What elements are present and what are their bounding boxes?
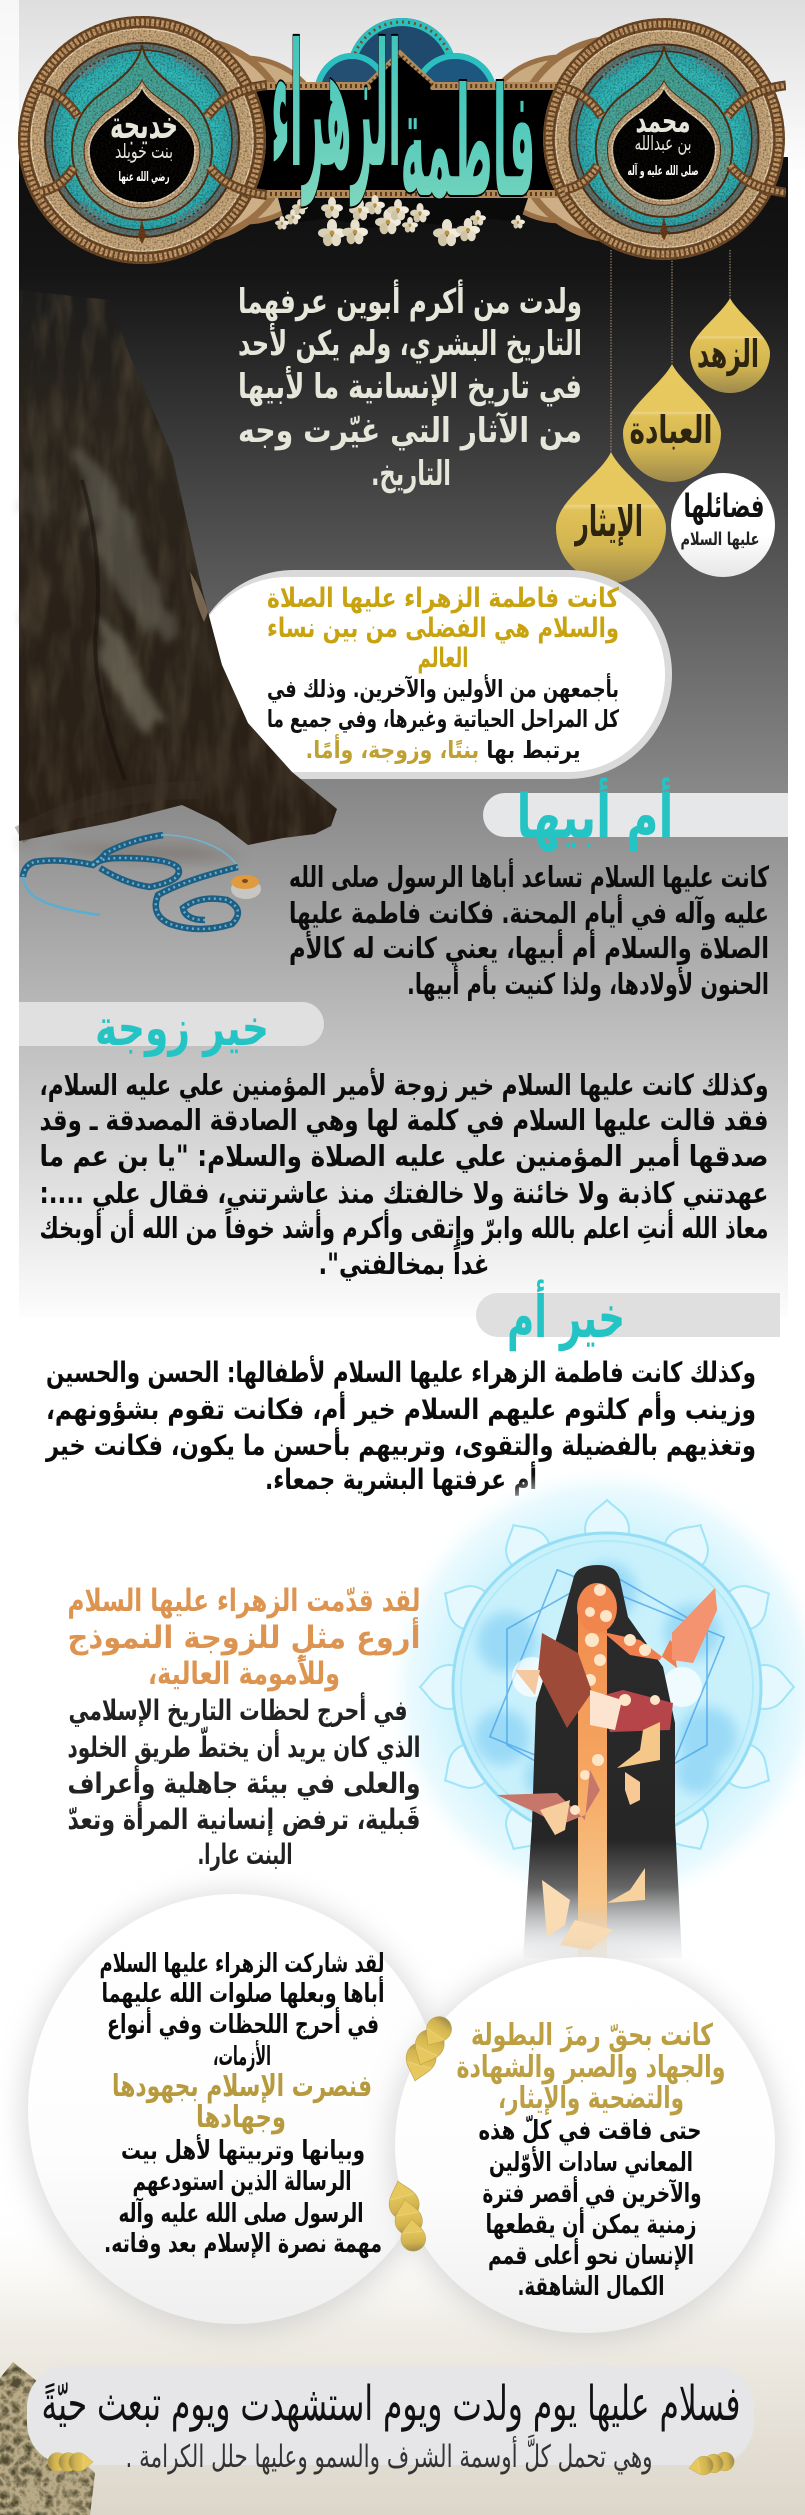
text block: model wife: الذي كان يريد أن يختطّ طريق الخلود: [68, 1726, 420, 1764]
medallion: Muhammad: محمد: [636, 102, 690, 140]
icon: gold petals, upper: [400, 2012, 456, 2085]
banner: closing salutation: [27, 2365, 754, 2475]
panel: left circle: الرسول صلى الله عليه وآله: [118, 2197, 364, 2229]
text block: model wife: والعلى في بيئة جاهلية وأعراف: [68, 1765, 420, 1800]
badge: virtues: فضائلها: [684, 487, 764, 525]
callout: white rounded panel: بأجمعهن من الأولين والآخرين. وذلك في: [267, 673, 619, 703]
heading: um abiha: أم أبيها: [516, 777, 674, 852]
panel: right circle: الكمال الشاهقة.: [518, 2272, 664, 2302]
virtues drops: [556, 298, 775, 583]
text block: best mother: أم عرفتها البشرية جمعاء.: [265, 1461, 537, 1496]
medallion: Khadija: خديجة: [110, 103, 178, 147]
text block: best wife: [40, 1067, 768, 1281]
intro text block: ولدت من أكرم أبوين عرفهما: [238, 279, 582, 322]
panel: right circle: الإنسان نحو أعلى قمم: [488, 2238, 694, 2271]
medallion: Khadija: رضي الله عنها: [118, 170, 170, 185]
text block: best wife: غداً بمخالفتي".: [318, 1244, 490, 1281]
intro text block: من الآثار التي غيّرت وجه: [238, 411, 582, 451]
medallion: Muhammad: [543, 18, 786, 260]
medallion: Khadija: [18, 16, 267, 264]
floral garland: [275, 195, 528, 246]
text block: model wife: لقد قدّمت الزهراء عليها السلام: [68, 1583, 420, 1619]
panel: left circle: وجهادها: [196, 2100, 286, 2135]
side rings: [90, 39, 716, 240]
heading: best wife: خير زوجة: [95, 999, 269, 1058]
medallion: Muhammad: بن عبدالله: [634, 131, 692, 155]
intro text block: [238, 279, 582, 494]
title calligraphy: [271, 8, 536, 231]
panel: left circle: مهمة نصرة الإسلام بعد وفاته.: [104, 2229, 382, 2259]
icon: prayer beads and candle: [23, 835, 261, 929]
ornament: bronze arabesque: [0, 2362, 95, 2515]
robe: [523, 1565, 682, 1958]
text block: model wife: وللأمومة العالية،: [148, 1654, 340, 1692]
callout: white rounded panel: يرتبط بها بنتًا، وزوجة، وأمًا.: [306, 734, 580, 764]
heading: um abiha: [483, 777, 788, 852]
intro text block: التاريخ.: [371, 454, 451, 494]
medallion: Muhammad: صلى الله عليه و آله: [628, 162, 698, 179]
intro text block: التاريخ البشري، ولم يكن لأحد: [238, 322, 582, 364]
drop: ibada: العبادة: [630, 408, 712, 452]
panel: left circle: وبيانها وتربيتها لأهل بيت: [121, 2134, 365, 2166]
callout: white rounded panel: العالم: [418, 643, 468, 674]
dark gradient panel: [19, 157, 788, 1318]
heading: best mother: خير أم: [507, 1279, 625, 1352]
icon: small gold petals, left: [48, 2453, 93, 2471]
panel: left circle: الرسالة الذين استودعهم: [132, 2167, 352, 2197]
text block: model wife: [68, 1583, 420, 1871]
callout: white rounded panel: [190, 570, 672, 779]
illustration: woman with mandala and butterflies: [382, 1462, 805, 1958]
panel: right circle: حتى فاقت في كلّ هذه: [478, 2115, 702, 2146]
floral stripe: [577, 1583, 617, 1958]
panel: left circle: [23, 1892, 447, 2332]
mandala: [382, 1462, 805, 1912]
intro text block: في تاريخ الإنسانية ما لأبيها: [238, 365, 582, 407]
panel: left circle: لقد شاركت الزهراء عليها السلام: [100, 1949, 384, 1979]
drop: ithar: الإيثار: [574, 497, 643, 546]
panel: right circle: [390, 1956, 780, 2340]
panel: right circle: زمنية يمكن أن يقطعها: [486, 2207, 696, 2240]
drop: zuhd: [690, 298, 770, 393]
medallion: Khadija: بنت خويلد: [115, 139, 173, 163]
drop: ithar: [556, 452, 666, 583]
badge: virtues: عليها السلام: [680, 529, 760, 550]
text block: best mother: [44, 1355, 756, 1496]
panel: right circle: والتضحية والإيثار،: [498, 2081, 684, 2116]
domes: [300, 18, 505, 137]
text block: model wife: البنت عارا.: [198, 1838, 292, 1871]
icon: gold petals, lower: [383, 2177, 427, 2252]
badge: virtues: [671, 473, 775, 577]
text block: um abiha: [289, 858, 769, 1001]
panel: right circle: كانت بحقّ رمزَ البطولة: [471, 2018, 713, 2053]
panel: left circle: أباها وبعلها صلوات الله عليهما: [102, 1976, 384, 2009]
panel: left circle: فنصرت الإسلام بجهودها: [112, 2069, 372, 2104]
drop: zuhd: الزهد: [697, 332, 759, 376]
heading: best mother: [476, 1279, 780, 1352]
panel: right circle: المعاني سادات الأوّلين: [489, 2146, 693, 2178]
text block: model wife: في أحرج لحظات التاريخ الإسلامي: [68, 1692, 408, 1728]
butterflies: [497, 1588, 717, 1950]
text block: model wife: قَبلية، ترفض إنسانية المرأة وتعدّ: [68, 1801, 420, 1837]
title bar: [240, 55, 565, 198]
header: ornamental frame and title: [18, 8, 786, 264]
callout: white rounded panel: كل المراحل الحياتية وغيرها، وفي جميع ما: [267, 705, 619, 733]
panel: left circle: في أحرج اللحظات وفي أنواع: [107, 2007, 379, 2040]
panel: right circle: والآخرين في أقصر فترة: [482, 2176, 702, 2209]
panel: left circle: الأزمات،: [213, 2040, 271, 2072]
text block: model wife: أروع مثلٍ للزوجة النموذج: [68, 1617, 420, 1663]
hanging threads: [611, 250, 730, 452]
icon: small gold petals, right: [687, 2451, 736, 2477]
callout: white rounded panel: كانت فاطمة الزهراء عليها الصلاة: [267, 583, 619, 614]
callout: white rounded panel: والسلام هي الفضلى من بين نساء: [267, 613, 619, 644]
fabric: draped cloak: [19, 290, 337, 861]
drop: ibada: [623, 364, 721, 482]
